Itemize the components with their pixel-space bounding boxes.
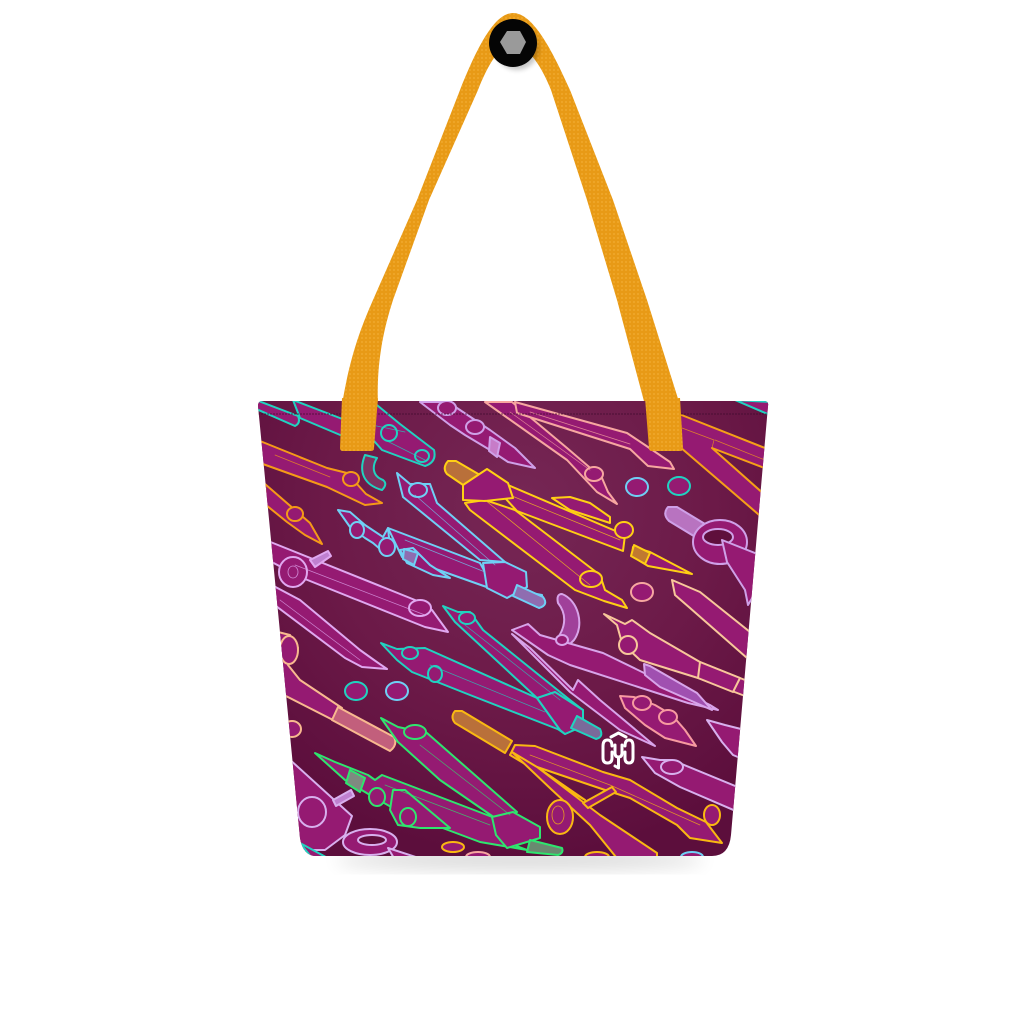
pattern: teal fragment top right: [735, 401, 768, 415]
pattern: loose discs lower: [345, 682, 408, 700]
pattern: lilac arc compass centre: [512, 594, 718, 746]
pattern: peach compass left with handle: [278, 632, 395, 751]
hem stitch line: [258, 414, 767, 415]
right strap attached end: [645, 398, 683, 451]
pattern: peach compass right: [604, 580, 760, 696]
pattern: lilac big compass left: [268, 541, 448, 669]
bag body: [250, 395, 780, 865]
pattern: small orange compass: [265, 484, 322, 544]
pattern: orange compass right: [680, 414, 764, 516]
pattern: loose discs top: [626, 477, 690, 601]
handle strap loop: [342, 13, 680, 405]
drop shadow under bag: [335, 851, 705, 869]
wall peg shadow: [495, 26, 539, 70]
pattern: yellow compass centre: [445, 461, 692, 608]
pattern: lilac small compasses right: [642, 720, 745, 815]
pattern: lilac compass top: [420, 401, 535, 468]
pattern: blue compass centre: [338, 473, 545, 608]
pattern: pink compass top: [485, 402, 674, 504]
pattern: orange compass left: [260, 441, 382, 505]
pattern: green compass bottom: [315, 718, 562, 855]
wall peg: [489, 19, 537, 67]
pattern: lilac ring compass right: [665, 507, 760, 605]
pattern: teal compass centre: [381, 606, 601, 739]
peg hex screw: [500, 31, 526, 54]
pattern: amber compass bottom: [452, 711, 722, 862]
pattern: bottom edge fragments: [441, 841, 704, 856]
tote bag product illustration: [258, 13, 768, 874]
left strap attached end: [340, 398, 378, 451]
pattern: lilac compass bottom left: [292, 760, 416, 856]
pattern: teal fragment bottom left: [300, 842, 326, 856]
brand logo: [603, 733, 633, 768]
pattern: teal compass top left: [254, 400, 435, 490]
pattern: pink bullet compass: [620, 696, 696, 746]
